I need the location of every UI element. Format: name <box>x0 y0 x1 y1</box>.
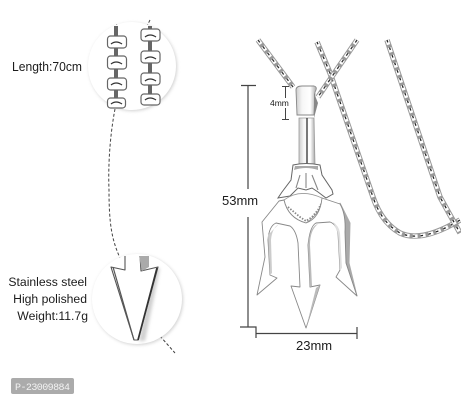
arrow tip <box>111 256 160 341</box>
chain links, right strand <box>148 26 152 104</box>
magnified chain circle <box>88 22 177 111</box>
dimension: 23mm width: 23mm <box>296 338 332 353</box>
chain: left to bail <box>258 40 293 87</box>
dimension: 23mm width <box>256 327 357 353</box>
chain: right to bail <box>318 40 357 97</box>
chains <box>258 40 460 236</box>
dashed leader lines <box>109 20 175 353</box>
prongs <box>257 198 357 328</box>
trident pendant <box>257 86 357 328</box>
callout: material and weight: Weight:11.7g <box>17 309 88 323</box>
chain: long loop <box>317 42 460 236</box>
collar and shell <box>278 164 333 223</box>
magnified arrow tip circle <box>92 254 183 345</box>
callout: material and weight: High polished <box>13 292 87 306</box>
chain links, left strand <box>108 26 160 108</box>
bail <box>296 86 318 165</box>
callout: material and weight: Stainless steel <box>8 275 87 289</box>
watermark product code: P-23009884 <box>15 383 70 394</box>
dimension: 4mm bail <box>269 86 290 120</box>
callout: material and weight <box>8 275 88 323</box>
callout: chain length label: Length:70cm <box>12 60 82 74</box>
chain: far right <box>387 40 460 233</box>
dimension: 53mm height <box>222 85 258 338</box>
dimension: 53mm height: 53mm <box>222 193 258 208</box>
watermark product code <box>11 378 74 394</box>
dimension: 4mm bail: 4mm <box>270 98 289 108</box>
